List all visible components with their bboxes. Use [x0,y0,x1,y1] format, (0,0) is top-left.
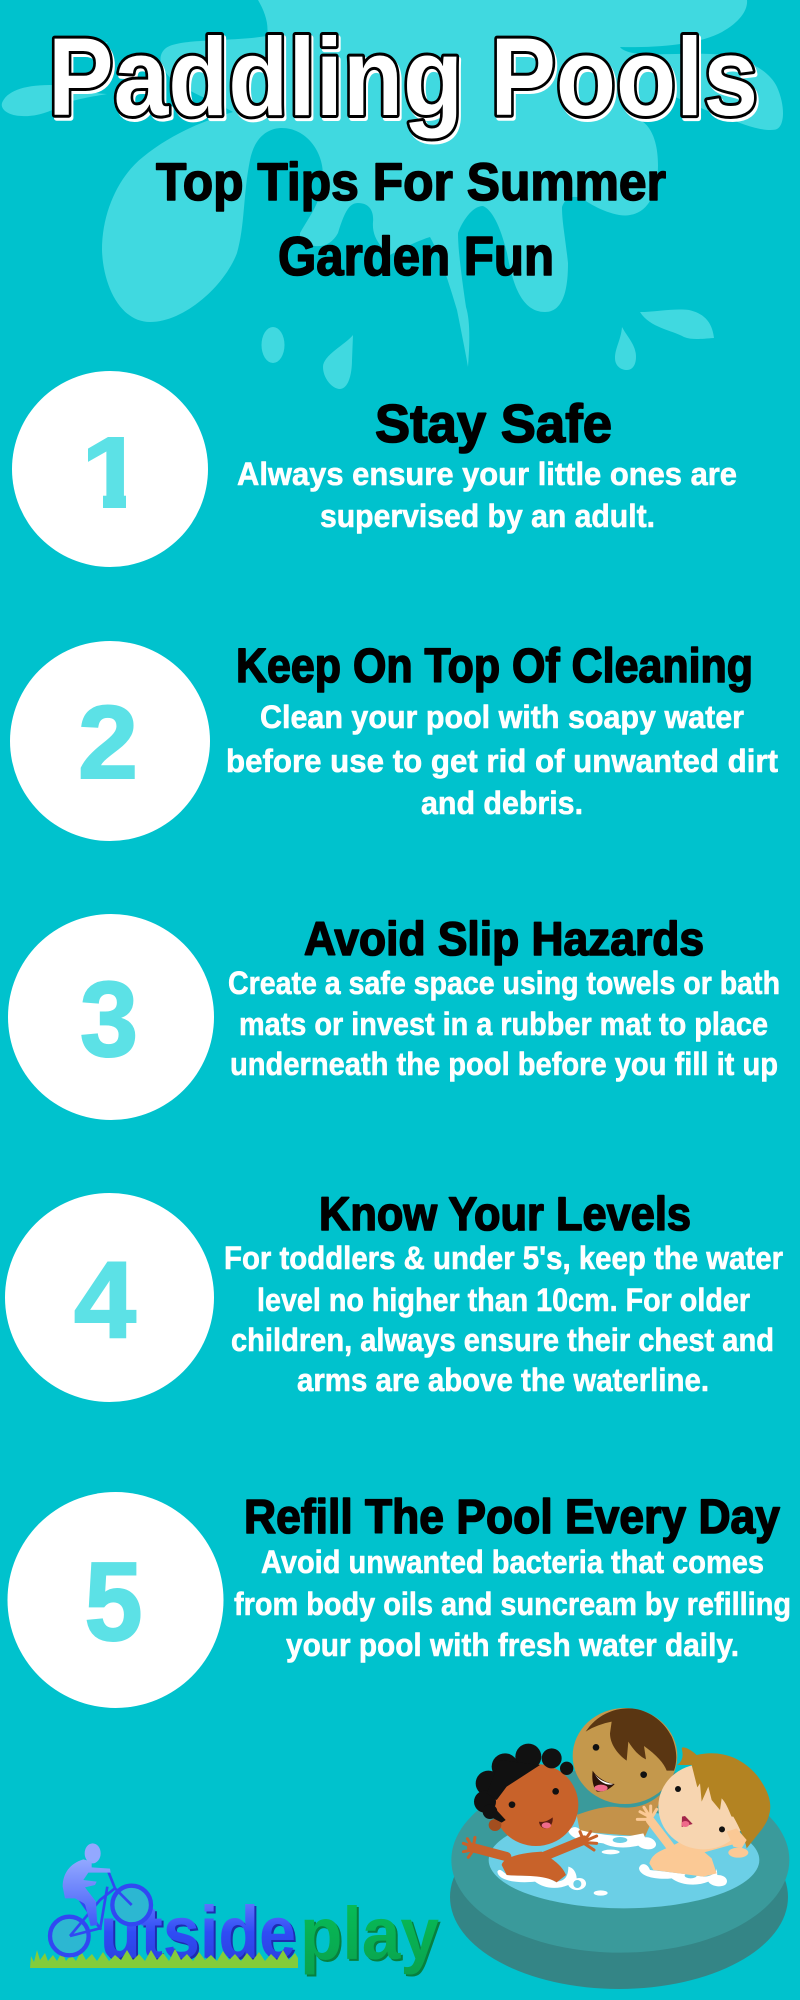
number badge 1: 1 [82,417,144,529]
subtitle [156,153,666,287]
number badge 2: 2 [78,685,138,801]
logo wordmark: utside [100,1891,296,1974]
body text: supervised by an adult. [320,498,655,534]
number badge 4: 4 [74,1239,136,1361]
body text: level no higher than 10cm. For older [257,1282,750,1318]
tip 2 [10,640,778,841]
tip 3 [8,912,780,1120]
number badge 4 [5,1193,214,1402]
number badge 2 [10,641,210,841]
body text [224,1240,783,1398]
number badge 3 [8,914,214,1120]
number badge 1 [12,371,208,567]
body text: your pool with fresh water daily. [286,1627,739,1663]
body text: before use to get rid of unwanted dirt [226,743,778,779]
heading: know your levels: Know Your Levels [319,1187,691,1240]
logo wordmark [100,1891,441,1977]
water splash backdrop [2,0,783,389]
logo wordmark: play [302,1894,441,1977]
body text [237,456,737,534]
tip 1 [12,371,737,567]
subtitle: Garden Fun [278,225,554,287]
child: right [637,1747,770,1886]
number badge 3: 3 [80,959,138,1079]
heading: avoid slip hazards: Avoid Slip Hazards [304,912,704,965]
body text [228,965,780,1082]
body text [226,699,778,821]
body text: Always ensure your little ones are [237,456,737,492]
body text: Avoid unwanted bacteria that comes [261,1544,764,1580]
heading: keep on top of cleaning: Keep On Top Of Cleaning [236,640,753,693]
body text: Clean your pool with soapy water [260,699,744,735]
number badge 5: 5 [84,1540,142,1664]
pool illustration with children [450,1708,789,1989]
child: middle [568,1708,677,1896]
subtitle: Top Tips For Summer [156,153,666,212]
logo: outside play [30,1843,441,1977]
heading: stay safe: Stay Safe [375,394,612,454]
grass strip [30,1949,298,1968]
body text [234,1544,791,1663]
tip 4 [5,1187,783,1402]
cyclist silhouette [50,1843,151,1955]
child: left [463,1744,597,1890]
number badge 5 [8,1492,224,1708]
tip 5 [8,1491,791,1708]
body text: arms are above the waterline. [297,1362,709,1398]
paddling pool [450,1767,789,1989]
body text: and debris. [421,785,583,821]
logo wordmark: utside [102,1893,298,1976]
logo wordmark: play [300,1892,439,1975]
